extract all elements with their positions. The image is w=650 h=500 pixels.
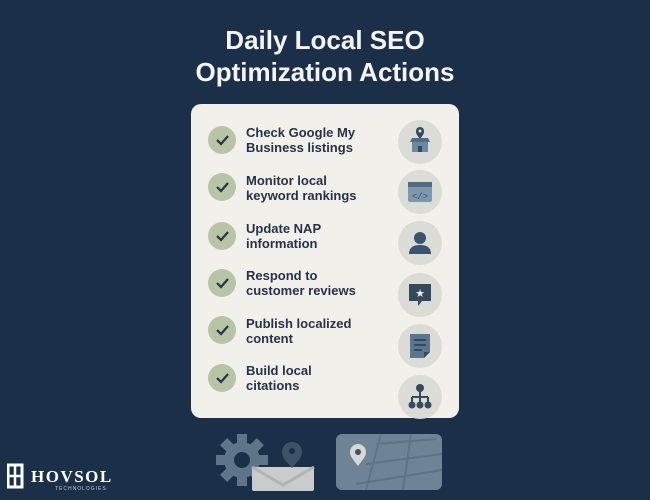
text 2: Monitor local — [246, 173, 327, 188]
icon: store with pin — [398, 120, 442, 164]
text 4: Respond to — [246, 268, 318, 283]
text 6: citations — [246, 378, 299, 393]
icon: review bubble — [398, 273, 442, 317]
text 4 — [246, 268, 356, 298]
text 1: Check Google My — [246, 125, 355, 140]
title: Daily Local SEO — [225, 25, 425, 55]
text 3: Update NAP — [246, 221, 321, 236]
icon: hierarchy — [398, 375, 442, 419]
icon: code window: </> — [412, 192, 428, 202]
panel: checklist card — [191, 104, 459, 418]
icon: review bubble: ★ — [415, 288, 425, 300]
check 5 — [208, 316, 236, 344]
text 6: Build local — [246, 363, 312, 378]
check 1 — [208, 126, 236, 154]
check 6 — [208, 364, 236, 392]
text 2: keyword rankings — [246, 188, 357, 203]
logo — [7, 464, 113, 492]
icon: person — [398, 221, 442, 265]
text 5: content — [246, 331, 293, 346]
check 2 — [208, 173, 236, 201]
text 3: information — [246, 236, 318, 251]
title — [195, 25, 455, 87]
title: Optimization Actions — [195, 57, 455, 87]
text 1: Business listings — [246, 140, 353, 155]
text 6 — [246, 363, 312, 393]
logo: TECHNOLOGIES — [55, 486, 107, 492]
text 5 — [246, 316, 351, 346]
icon: map — [336, 434, 442, 490]
text 1 — [246, 125, 355, 155]
icon: document — [398, 324, 442, 368]
text 3 — [246, 221, 321, 251]
text 5: Publish localized — [246, 316, 351, 331]
icon: gear and mail — [216, 434, 315, 491]
check 3 — [208, 222, 236, 250]
text 4: customer reviews — [246, 283, 356, 298]
icon: code window — [398, 170, 442, 214]
logo: HOVSOL — [31, 467, 113, 486]
check 4 — [208, 269, 236, 297]
text 2 — [246, 173, 357, 203]
